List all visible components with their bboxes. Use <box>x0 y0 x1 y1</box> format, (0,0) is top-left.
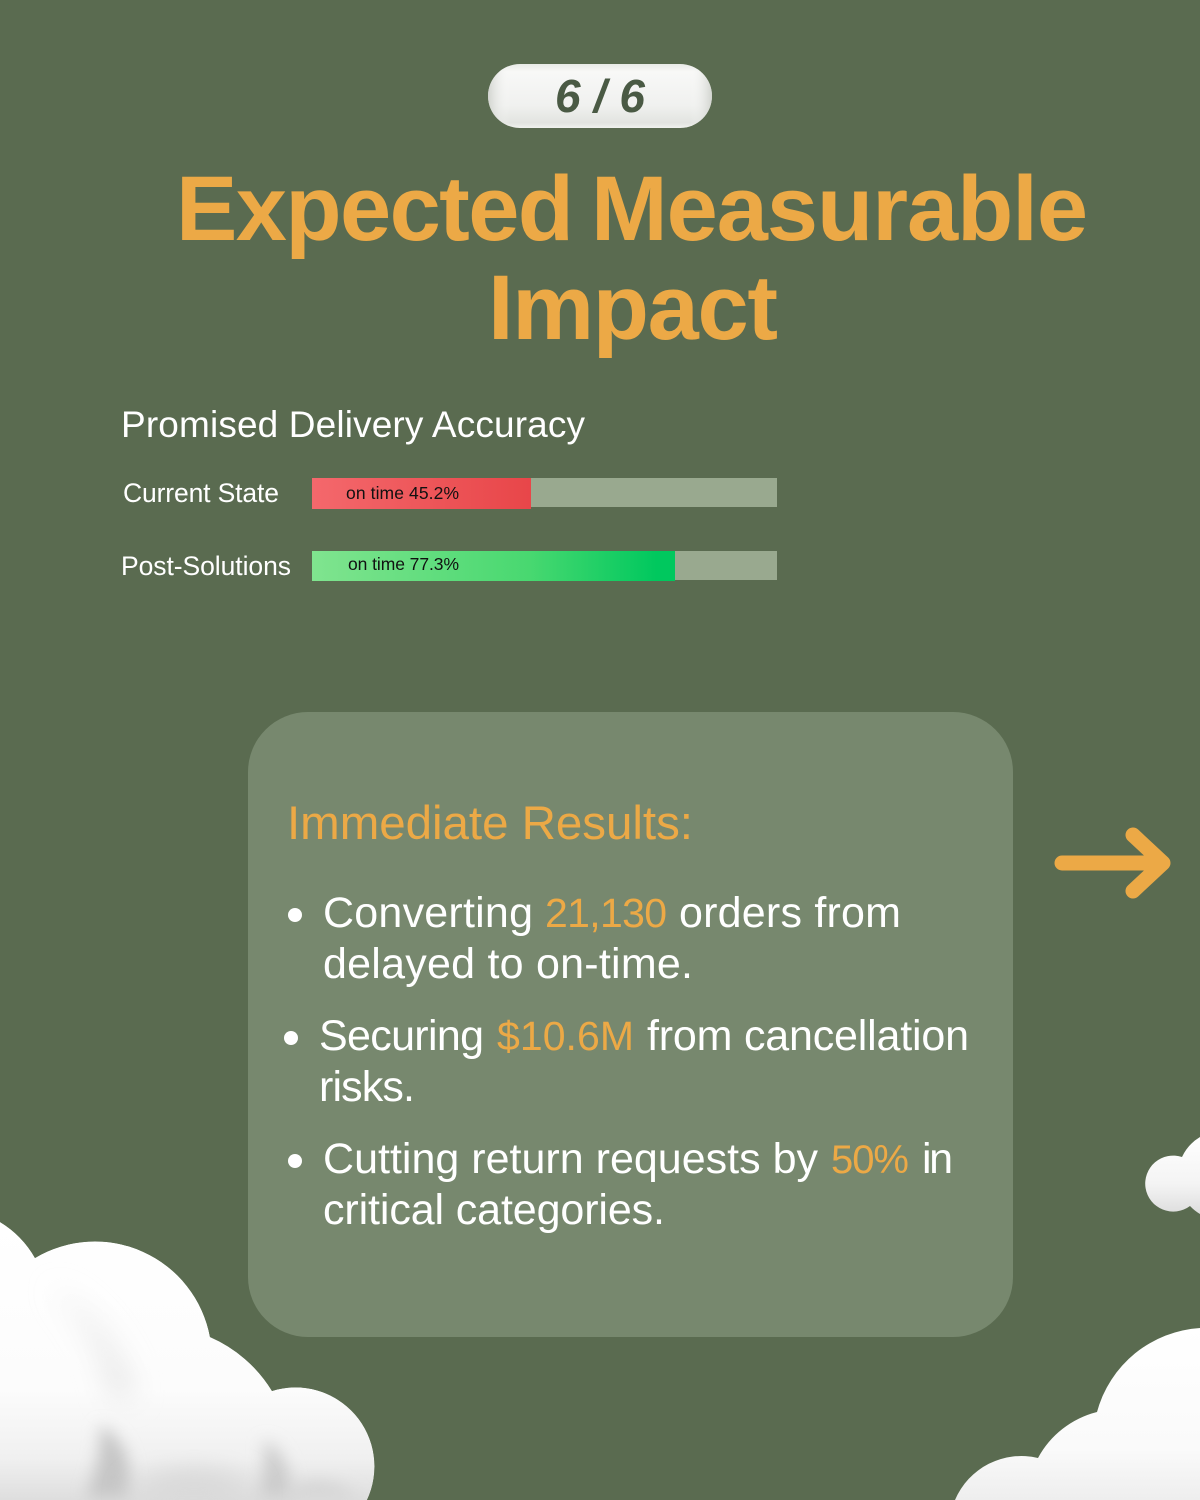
bullet: converting orders: delayed to on-time. <box>323 940 693 988</box>
page badge: 6/6: 6/6 <box>555 70 645 122</box>
title: Expected <box>176 158 574 260</box>
bullet: securing revenue: risks. <box>319 1063 415 1111</box>
bullet: cutting returns <box>288 1135 953 1234</box>
bar row: post-solutions: on time 77.3% <box>348 554 459 574</box>
bullet: cutting returns: critical categories. <box>323 1186 665 1234</box>
title <box>176 158 1088 359</box>
panel: immediate results <box>248 712 1013 1337</box>
bar row: current state: on time 45.2% <box>346 483 459 503</box>
icon: cloud bottom right <box>955 1328 1200 1500</box>
bar row: current state <box>123 478 777 509</box>
bullet: cutting returns: in <box>922 1135 953 1183</box>
bar row: post-solutions: Post-Solutions <box>121 551 291 581</box>
bullet: securing revenue: from cancellation <box>647 1012 969 1060</box>
bullet: cutting returns: Cutting return requests by <box>323 1135 818 1183</box>
bullet: converting orders: orders from <box>679 889 901 937</box>
bullet: securing revenue: Securing <box>319 1012 484 1060</box>
bullet: converting orders: Converting <box>323 889 533 937</box>
bullet: converting orders <box>288 889 901 988</box>
bar row: post-solutions <box>121 551 777 581</box>
icon: cloud bottom left <box>0 1222 374 1500</box>
page badge: 6/6 <box>488 64 712 128</box>
bullet: securing revenue: $10.6M <box>497 1013 634 1059</box>
bar row: current state: Current State <box>123 478 279 508</box>
chart heading: Promised Delivery Accuracy <box>121 404 586 445</box>
bullet: converting orders: 21,130 <box>545 890 667 936</box>
title: Impact <box>488 257 778 359</box>
chart: promised delivery accuracy <box>121 404 777 581</box>
panel heading: Immediate Results: <box>287 797 693 850</box>
bullet: cutting returns: 50% <box>831 1138 909 1182</box>
bullet: securing revenue <box>284 1012 969 1111</box>
icon: arrow <box>1062 835 1163 891</box>
title: Measurable <box>591 158 1088 260</box>
icon: cloud top right <box>1145 1137 1200 1214</box>
